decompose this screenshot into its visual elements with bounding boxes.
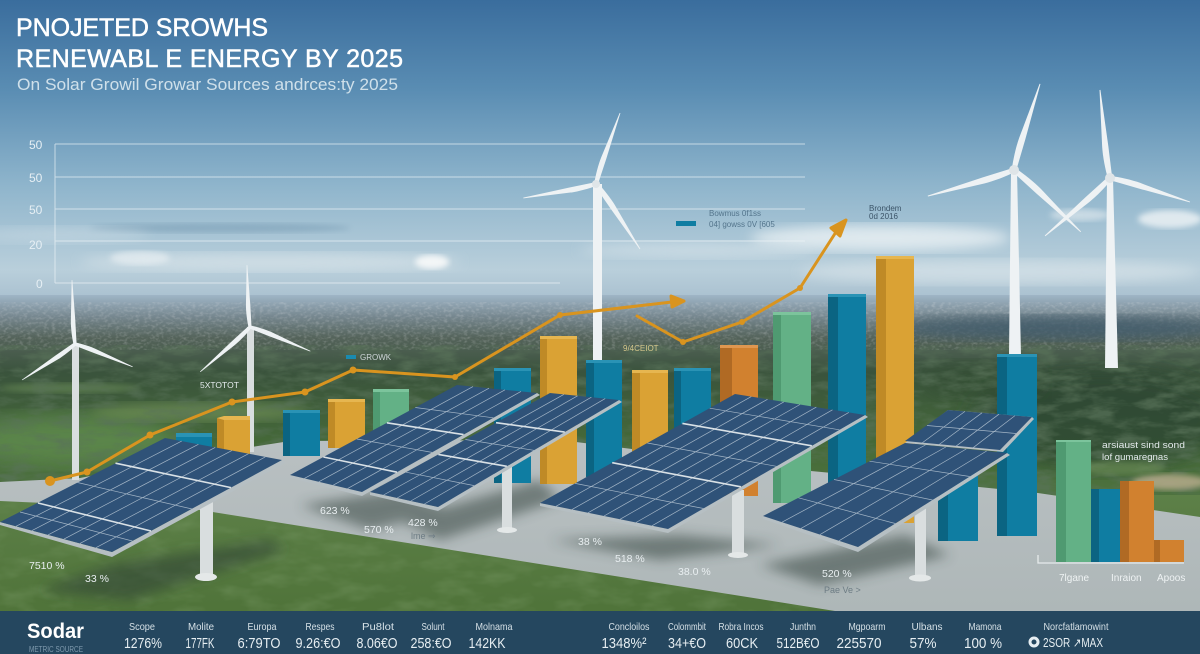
footer stat: Mgpoarm [848,621,886,633]
footer stat [356,621,398,652]
y axis labels [29,138,43,291]
solar panel 2 [290,385,540,496]
footer stat [668,621,706,652]
support post: panel 4 [728,490,748,558]
chart end label: Brondem [869,204,902,213]
percentages: 33 % [85,573,109,585]
axis [1038,555,1184,563]
solar panel 1 [0,438,285,557]
footer stat: 6:79TO [238,635,280,652]
footer stat [718,621,764,652]
footer stat: 225570 [836,635,882,652]
tag: left: 5XTOTOT [200,380,239,390]
scene labels [29,344,861,595]
footer stat: 1348%² [602,635,647,652]
footer stat: 9.26:€O [296,635,340,652]
bar [1056,440,1091,562]
bar [1091,489,1124,562]
footer stat: Norcfatlamowint [1044,621,1109,633]
solar panel 5 upper [905,410,1034,452]
chart legend [676,209,775,229]
axis labels: 7lgane [1059,573,1089,584]
background: clouds [0,209,1200,284]
footer stat [836,621,886,652]
subtitle: On Solar Growil Growar Sources andrces:ty 2025 [17,76,398,94]
footer stat [776,621,820,652]
y axis labels: 0 [36,277,43,291]
footer stat: 1276% [124,635,162,652]
title [16,14,403,73]
support post: panel 3 [497,465,517,533]
footer stat: Molnama [476,621,513,633]
tag: centre: 9/4CEIOT [623,344,659,353]
percentages: 570 % [364,524,394,536]
chart caption [1102,440,1185,463]
percentages: 428 % [408,517,438,529]
footer stat: 8.06€O [356,635,398,652]
background: sky [0,0,1200,300]
chart caption: arsiaust sind sond [1102,440,1185,451]
background: panel shadows [40,480,950,600]
background: grey platform [0,440,1200,611]
axis labels: Inraion [1111,573,1142,584]
footer stat [124,621,162,652]
small notes [411,531,861,595]
y axis labels: 50 [29,203,43,217]
bar 14 [876,256,914,523]
wind turbine 4 [927,83,1084,356]
bar 1 [176,433,212,458]
solar panel 3 [370,393,622,511]
chart legend: 04] gowss 0V [605 [709,220,775,229]
footer stat [296,621,340,652]
small notes: Pae Ve > [824,585,861,595]
chart grid and y axis [29,138,805,291]
percentages: 38 % [578,536,602,548]
small notes: lme ⇒ [411,531,436,541]
footer stat [910,621,942,652]
support post: panel 5 [909,505,931,582]
bar [1120,481,1154,562]
footer stat [964,621,1002,652]
trend line with arrows [45,220,846,486]
wind turbine 5 [1044,90,1191,368]
background: landscape [0,295,1200,510]
percentages: 38.0 % [678,566,711,578]
bar 16 [997,354,1037,536]
footer stat: 512B€O [776,635,820,652]
footer stat: 177FK [186,635,214,652]
chart caption: lof gumaregnas [1102,452,1168,463]
footer stat: Europa [248,621,277,633]
percentages: 520 % [822,568,852,580]
footer stat: Scope [129,621,155,633]
bar 15 [938,470,978,541]
bar 7 [540,336,577,484]
bar chart: main 3D bars [176,256,1037,541]
footer stat [186,621,214,652]
bar 2 [217,416,250,454]
footer stat: Pu8lot [362,621,394,633]
bar 11 [720,345,758,496]
wind turbine 1 [21,280,134,480]
chart end label: 0d 2016 [869,212,898,221]
footer stat: 100 % [964,635,1002,652]
axis labels: Apoos [1157,573,1185,584]
y axis labels: 50 [29,171,43,185]
solar panel 4 [540,394,868,533]
footer stat [468,621,513,652]
percentages: 518 % [615,553,645,565]
tag: middle left [346,353,392,362]
footer stat: 60CK [726,635,758,652]
footer brand [27,620,84,654]
heading [16,14,403,94]
bar 5 [373,389,409,431]
tag: middle left: GROWK [360,353,392,362]
footer stat: Concloilos [608,621,650,633]
wind turbine 2 [199,265,312,452]
footer stat: Junthn [790,621,816,633]
title: PNOJETED SROWHS [16,14,268,42]
bar 12 [773,312,811,503]
support post: panel 1 [195,500,217,581]
footer stat: Colommbit [668,621,706,633]
title: RENEWABL E ENERGY BY 2025 [16,45,403,73]
footer stat: Mamona [968,621,1002,633]
bar chart: small right chart [1038,440,1185,584]
solar panel 5 lower [763,443,1010,552]
footer stat [602,621,650,652]
footer stat [1030,621,1109,650]
footer stat: Ulbans [912,621,942,633]
footer brand: Sodar [27,620,84,643]
bar 8 [586,360,622,477]
bar 3 [283,410,320,456]
footer stat [410,621,452,652]
footer stat: Respes [306,621,334,633]
wind turbine 3 [523,112,643,364]
footer stat: 57% [910,635,936,652]
footer stat [238,621,280,652]
bar 10 [674,368,711,432]
percentages: 7510 % [29,560,65,572]
footer stat: 258:€O [410,635,452,652]
bar 6 [494,368,531,483]
footer bar [0,611,1200,654]
bar 4 [328,399,365,448]
bar [1154,540,1184,562]
bar 13 [828,294,866,486]
footer stat: Solunt [422,621,445,633]
footer stat: Robra Incos [718,621,764,633]
footer stat: 142KK [468,635,506,652]
footer brand: METRIC SOURCE [29,645,83,654]
footer stat: 34+€O [668,635,706,652]
bar 9 [632,370,668,457]
axis labels [1059,573,1185,584]
percentages [29,505,852,585]
footer stat: 2SOR ↗MAX [1043,636,1104,650]
footer stat: Molite [188,621,214,633]
y axis labels: 20 [29,238,43,252]
percentages: 623 % [320,505,350,517]
chart legend: Bowmus 0f1ss [709,209,761,218]
background: green ground [0,495,1200,615]
y axis labels: 50 [29,138,43,152]
